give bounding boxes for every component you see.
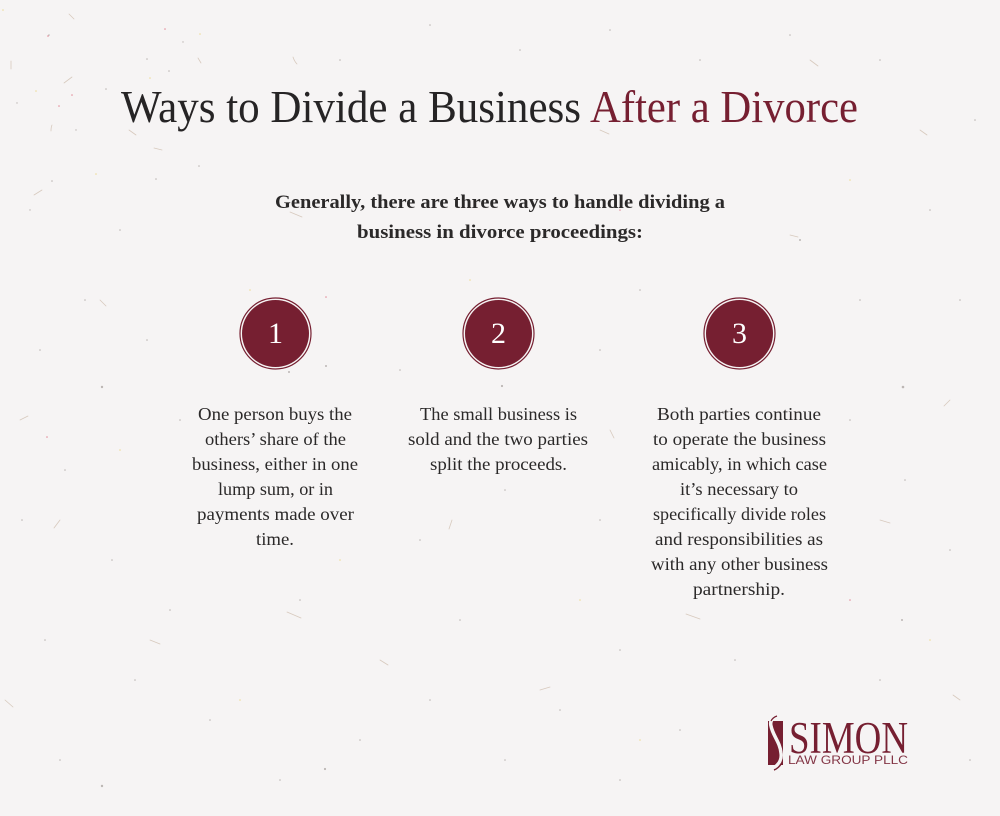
step 3 text: partnership. [693,579,785,599]
step 3 badge: 3 [732,317,747,350]
step 1 badge [240,298,311,369]
intro text: Generally, there are three ways to handle dividing a [275,192,726,213]
step 2 text [408,404,588,474]
logo tagline: LAW GROUP PLLC [788,755,908,767]
step 3 text: and responsibilities as [655,529,823,549]
step 1 text: time. [256,529,294,549]
step 1 text: One person buys the [198,404,352,424]
step 1 text: lump sum, or in [218,479,333,499]
step 3 text: Both parties continue [657,404,821,424]
step 1 text [192,404,358,549]
title: Ways to Divide a Business [121,81,581,132]
logo wordmark: SIMON [789,713,908,763]
step 2 text: The small business is [420,404,577,424]
step 3 text [651,404,828,599]
step 2 text: split the proceeds. [430,454,567,474]
logo: Simon Law Group PLLC [768,713,908,770]
step 1 badge: 1 [268,317,283,350]
step 2 text: sold and the two parties [408,429,588,449]
step 3 text: with any other business [651,554,828,574]
intro text: business in divorce proceedings: [357,222,643,243]
step 3 text: to operate the business [653,429,826,449]
step 3 badge [704,298,775,369]
logo mark: curved S bar [768,716,783,770]
step 2 badge: 2 [491,317,506,350]
step 3 text: specifically divide roles [653,504,826,524]
step 3 text: amicably, in which case [652,454,827,474]
title: After a Divorce [590,81,858,132]
step 1 text: payments made over [197,504,354,524]
step 1 text: others’ share of the [205,429,346,449]
intro text [275,192,726,243]
step 3 text: it’s necessary to [680,479,798,499]
step 1 text: business, either in one [192,454,358,474]
step 2 badge [463,298,534,369]
